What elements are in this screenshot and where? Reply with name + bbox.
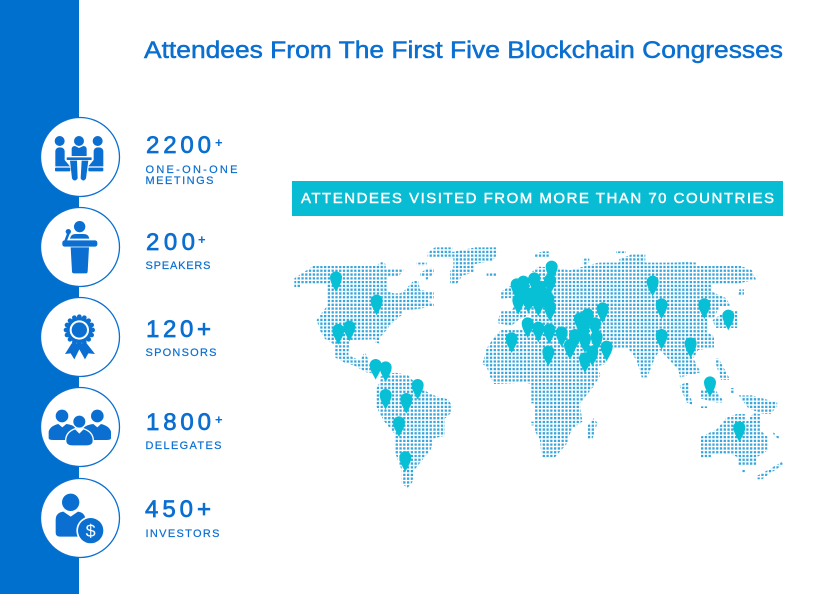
label: sponsors: SPONSORS [146, 347, 216, 359]
stat: one-on-one meetings: + [215, 135, 223, 150]
number: 1800+: 1800 [146, 409, 211, 436]
banner: attendees from 70 countries: ATTENDEES VISITED FROM MORE THAN 70 COUNTRIES [301, 190, 774, 207]
icon: award rosette [40, 298, 120, 376]
icon: meeting table [40, 118, 120, 196]
stat: investors [40, 478, 220, 558]
label: delegates: DELEGATES [146, 440, 222, 452]
stat: delegates [40, 388, 223, 466]
map pins: Asia and Oceania [647, 276, 745, 442]
stat: sponsors [40, 298, 216, 376]
icon: investor with dollar coin: $ [86, 521, 96, 541]
title: Attendees From The First Five Blockchain Congresses [144, 37, 783, 64]
label: speakers: SPEAKERS [146, 260, 210, 272]
number: 2200+: 2200 [146, 132, 211, 159]
label: one-on-one meetings: MEETINGS [146, 175, 214, 187]
number: 200+: 200 [146, 229, 195, 256]
stat: speakers [40, 208, 210, 286]
banner: attendees from 70 countries [292, 181, 783, 216]
number: 450+: 450+ [145, 496, 211, 523]
map pins: Europe, Middle East, North Africa [506, 261, 613, 373]
icon: delegates group [40, 388, 120, 466]
stat: delegates: + [215, 412, 223, 427]
map pins: Americas [330, 271, 424, 472]
label: one-on-one meetings [146, 164, 238, 187]
number: 120+: 120+ [146, 316, 211, 343]
icon: speaker at podium [40, 208, 120, 286]
icon: investor with dollar coin [40, 478, 120, 558]
label: one-on-one meetings: ONE-ON-ONE [146, 164, 238, 176]
dotted world map [294, 244, 785, 494]
blue sidebar [0, 0, 79, 594]
stat: one-on-one meetings [40, 118, 238, 196]
label: investors: INVESTORS [146, 528, 220, 540]
stat: speakers: + [198, 232, 206, 247]
